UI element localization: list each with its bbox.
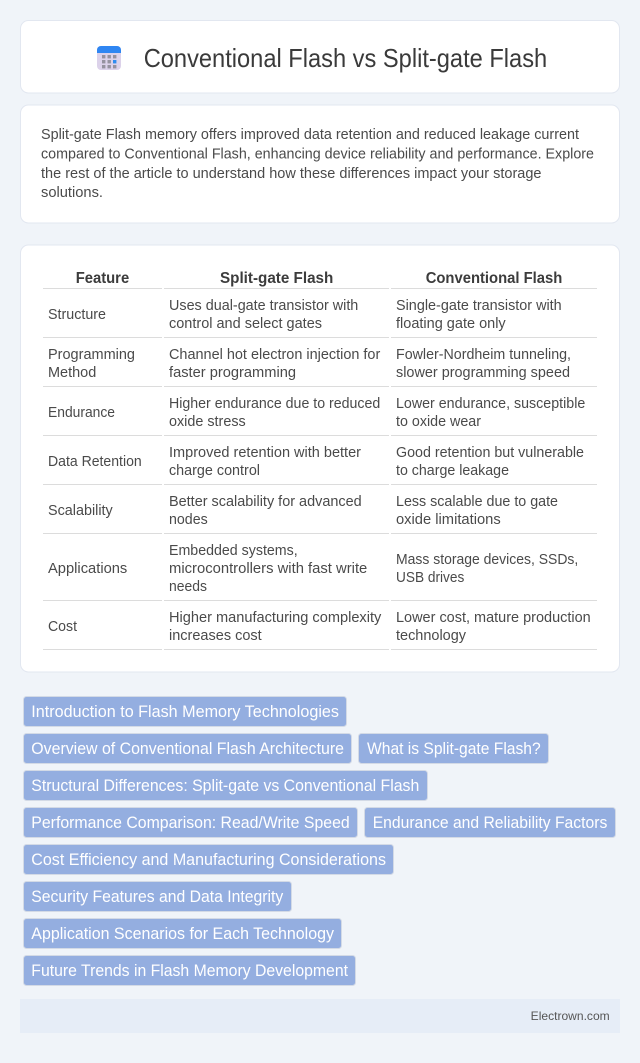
row: endurance: Higher endurance due to reduced xyxy=(169,396,380,412)
row: structure: Uses dual-gate transistor with xyxy=(169,298,358,314)
tag: what is split-gate xyxy=(358,734,548,764)
tag: what is split-gate: What is Split-gate Flash? xyxy=(367,740,541,758)
tag: structural differences xyxy=(24,770,428,800)
intro paragraph: the rest of the article to understand how these differences impact your storage xyxy=(41,166,542,182)
row: programming method: Fowler-Nordheim tunneling, xyxy=(396,347,571,363)
tag: conventional architecture: Overview of Conventional Flash Architecture xyxy=(31,740,344,758)
footer xyxy=(20,999,620,1033)
row: programming method xyxy=(43,347,597,387)
tag: endurance and reliability: Endurance and Reliability Factors xyxy=(373,814,607,832)
table header row: Feature xyxy=(76,270,129,287)
panel: comparison table xyxy=(20,245,620,672)
intro paragraph: Split-gate Flash memory offers improved data retention and reduced leakage current xyxy=(41,127,579,143)
tag: security features: Security Features and Data Integrity xyxy=(31,888,284,906)
row: applications: needs xyxy=(169,579,207,595)
row: endurance: Lower endurance, susceptible xyxy=(396,396,585,412)
row: data retention: charge control xyxy=(169,463,260,479)
row: scalability xyxy=(43,494,597,534)
table header row xyxy=(43,270,597,289)
tag: performance comparison xyxy=(24,808,358,838)
panel: title header xyxy=(20,20,620,93)
row: cost: increases cost xyxy=(169,628,262,644)
row: structure: Structure xyxy=(48,307,106,323)
intro paragraph xyxy=(41,127,594,201)
table header row: Split-gate Flash xyxy=(220,270,333,287)
tag: cost efficiency: Cost Efficiency and Manufacturing Considerations xyxy=(31,851,386,869)
tag: structural differences: Structural Differences: Split-gate vs Conventional Flash xyxy=(31,777,419,795)
row: programming method: slower programming speed xyxy=(396,365,570,381)
row: cost: Lower cost, mature production xyxy=(396,610,591,626)
row: scalability: Better scalability for advanced xyxy=(169,494,362,510)
row: cost: Higher manufacturing complexity xyxy=(169,610,382,626)
tag: introduction xyxy=(24,696,346,726)
row: endurance: oxide stress xyxy=(169,414,246,430)
intro paragraph: solutions. xyxy=(41,185,103,201)
row: programming method: Method xyxy=(48,365,96,381)
row: data retention: Improved retention with better xyxy=(169,445,361,461)
row: scalability: Scalability xyxy=(48,503,113,519)
row: data retention: Data Retention xyxy=(48,454,142,470)
row: cost xyxy=(43,610,597,650)
row: scalability: Less scalable due to gate xyxy=(396,494,558,510)
row: structure: Single-gate transistor with xyxy=(396,298,562,314)
row: programming method: faster programming xyxy=(169,365,296,381)
tag: introduction: Introduction to Flash Memory Technologies xyxy=(31,703,339,721)
row: scalability: oxide limitations xyxy=(396,512,501,528)
row: applications: USB drives xyxy=(396,570,464,586)
tag: security features xyxy=(24,882,292,912)
tag: application scenarios xyxy=(24,918,342,948)
row: data retention: Good retention but vulnerable xyxy=(396,445,584,461)
row: endurance: Endurance xyxy=(48,405,115,421)
tag: future trends: Future Trends in Flash Memory Development xyxy=(31,962,348,980)
intro paragraph: compared to Conventional Flash, enhancing device reliability and performance. Explore xyxy=(41,146,594,162)
row: applications xyxy=(43,543,597,601)
row: scalability: nodes xyxy=(169,512,208,528)
row: programming method: Channel hot electron injection for xyxy=(169,347,380,363)
row: applications: Mass storage devices, SSDs, xyxy=(396,552,578,568)
row: applications: Embedded systems, xyxy=(169,543,298,559)
row: structure xyxy=(43,298,597,338)
title: Conventional Flash vs Split-gate Flash xyxy=(144,43,547,73)
row: structure: floating gate only xyxy=(396,316,506,332)
table header row: Conventional Flash xyxy=(426,270,562,287)
row: applications: Applications xyxy=(48,561,127,577)
row: applications: microcontrollers with fast write xyxy=(169,561,367,577)
tag: endurance and reliability xyxy=(364,808,616,838)
row: cost: technology xyxy=(396,628,467,644)
row: programming method: Programming xyxy=(48,347,135,363)
row: endurance xyxy=(43,396,597,436)
tag: future trends xyxy=(24,956,356,986)
footer: Electrown.com xyxy=(531,1009,610,1023)
tag: cost efficiency xyxy=(24,844,394,874)
tag: application scenarios: Application Scenarios for Each Technology xyxy=(31,925,335,943)
row: data retention: to charge leakage xyxy=(396,463,509,479)
icon: calendar grid xyxy=(97,46,121,70)
tag: performance comparison: Performance Comparison: Read/Write Speed xyxy=(31,814,350,832)
row: structure: control and select gates xyxy=(169,316,322,332)
panel: topic tags xyxy=(24,696,616,986)
row: endurance: to oxide wear xyxy=(396,414,481,430)
tag: conventional architecture xyxy=(24,734,352,764)
panel: intro text xyxy=(20,105,620,223)
row: cost: Cost xyxy=(48,619,77,635)
row: data retention xyxy=(43,445,597,485)
